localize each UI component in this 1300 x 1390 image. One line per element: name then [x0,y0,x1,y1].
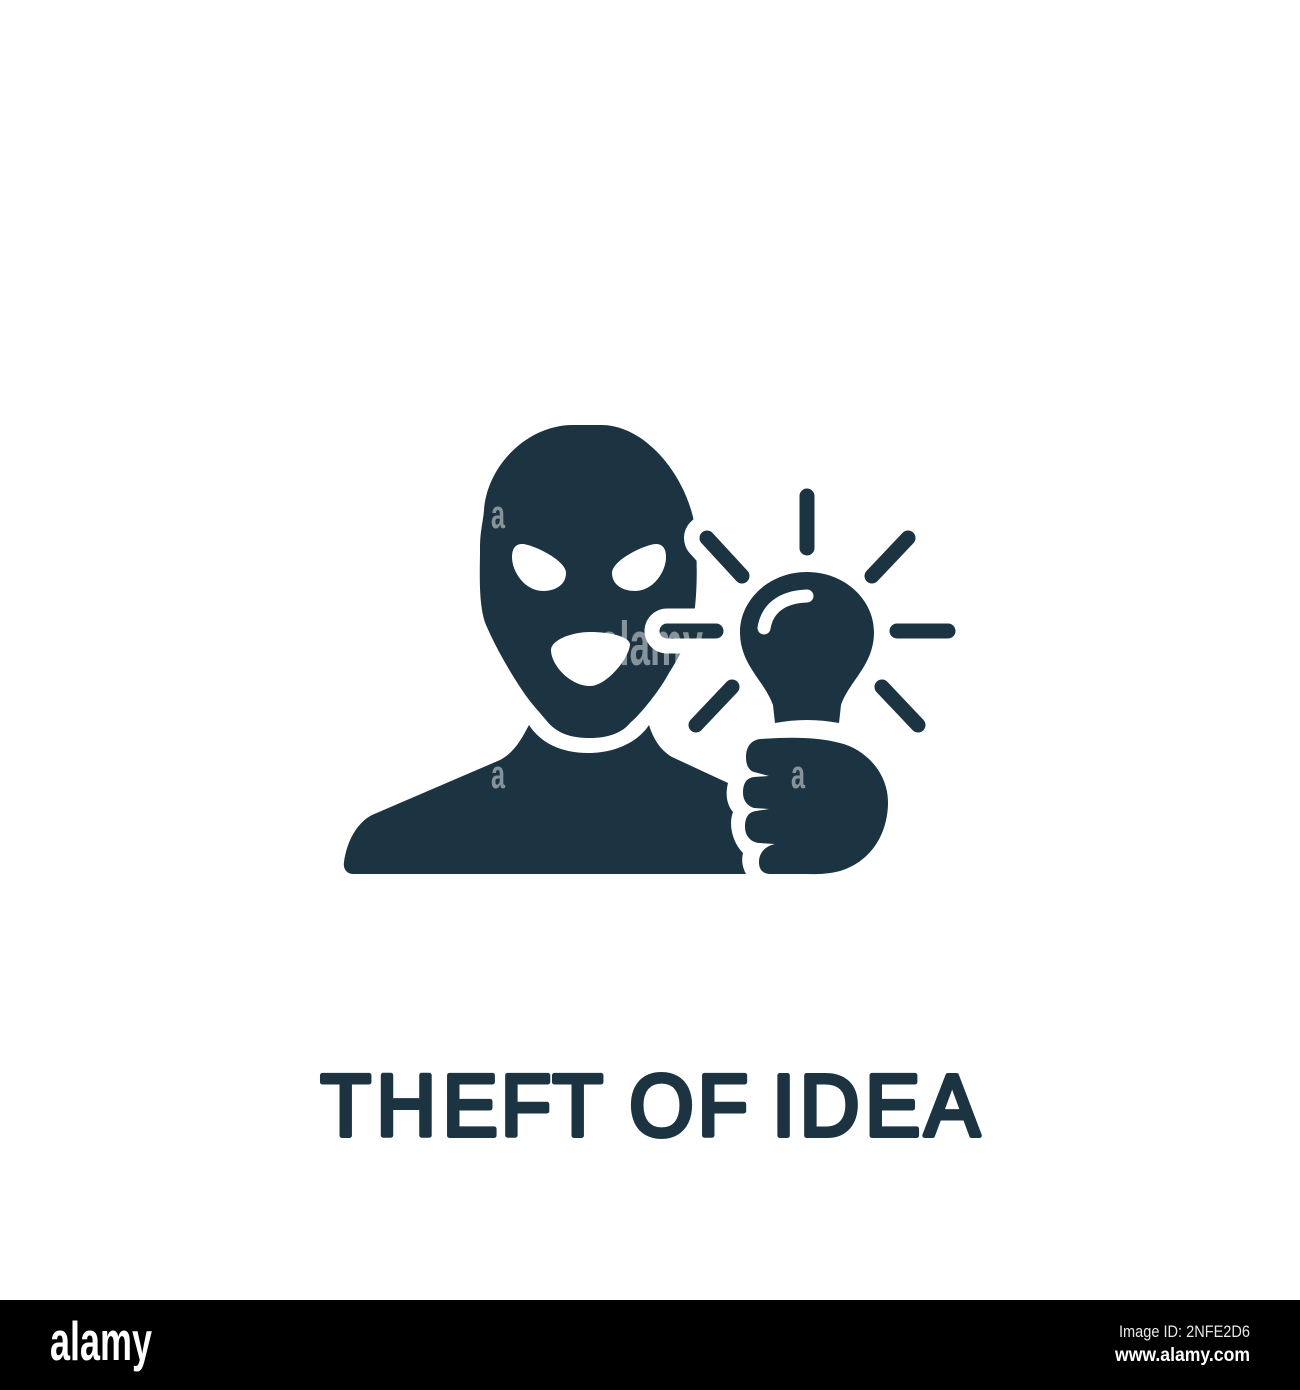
footer bar [0,1300,1300,1390]
icon: masked head [480,425,745,738]
title: THEFT OF IDEA [321,1057,980,1154]
icon: shoulders [344,725,746,874]
watermark: small marks on icon: a [491,493,505,537]
icon: clenched fist [743,738,888,874]
footer logo: alamy [50,1310,152,1372]
icon: light bulb [740,572,874,723]
watermark: small marks on icon [491,493,805,797]
watermark: small marks on icon: a [791,753,805,797]
footer url: www.alamy.com [1114,1345,1250,1366]
watermark: alamy on icon: alamy [599,610,703,679]
icon: light rays [667,496,948,725]
icon: masked thief holding a light bulb [344,425,948,874]
footer image id: Image ID: 2NFE2D6 [1119,1322,1250,1341]
watermark: small marks on icon: a [491,753,505,797]
